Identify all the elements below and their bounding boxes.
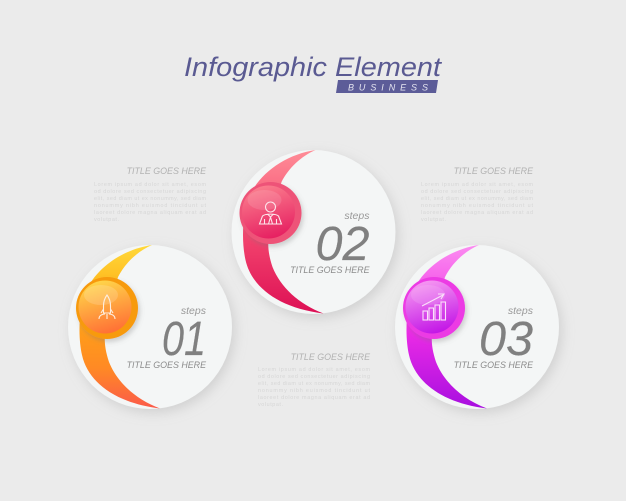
ribbon: red bbox=[243, 150, 324, 314]
text block: bottom bbox=[258, 352, 370, 408]
number: 01 bbox=[162, 313, 206, 366]
text block: bottom: TITLE GOES HERE bbox=[291, 352, 370, 362]
text block: left: laoreet dolore magna aliquam erat ad bbox=[94, 210, 206, 216]
text block: bottom: volutpat. bbox=[258, 402, 283, 408]
text block: bottom: Lorem ipsum ad dolor sit amet, esom bbox=[258, 367, 370, 373]
text block: bottom: elit, sed diam ut ex nonummy, sed diam bbox=[258, 381, 370, 387]
text block: left: od dolore sed consectetuer adipiscing bbox=[94, 189, 206, 195]
card title: TITLE GOES HERE bbox=[290, 265, 370, 275]
button: chart icon bbox=[403, 277, 465, 339]
icon: rocket bbox=[99, 295, 115, 319]
panel: step 01 bbox=[68, 245, 232, 409]
number: 03 bbox=[479, 313, 533, 366]
text block: bottom: od dolore sed consectetuer adipiscing bbox=[258, 374, 370, 380]
text block: right: od dolore sed consectetuer adipiscing bbox=[421, 189, 533, 195]
card title: TITLE GOES HERE bbox=[127, 360, 206, 370]
panel: step 03 bbox=[395, 245, 559, 409]
step label: steps bbox=[508, 305, 534, 317]
text block: right: Lorem ipsum ad dolor sit amet, esom bbox=[421, 182, 534, 188]
button: rocket icon bbox=[76, 277, 138, 339]
text block: right: nonummy nibh euismod tincidunt ut bbox=[421, 203, 534, 209]
card title: TITLE GOES HERE bbox=[454, 360, 533, 370]
icon: person bbox=[260, 202, 282, 224]
subtitle badge: business bbox=[336, 80, 438, 93]
text block: bottom: nonummy nibh euismod tincidunt ut bbox=[258, 388, 370, 394]
text block: right bbox=[421, 166, 534, 223]
text block: right: laoreet dolore magna aliquam erat ad bbox=[421, 210, 533, 216]
subtitle badge: business: BUSINESS bbox=[348, 82, 428, 92]
text block: left: elit, sed diam ut ex nonummy, sed diam bbox=[94, 196, 206, 202]
title: Infographic Element bbox=[184, 52, 443, 82]
text block: right: elit, sed diam ut ex nonummy, sed diam bbox=[421, 196, 534, 202]
step label: steps bbox=[344, 210, 370, 222]
ribbon: magenta bbox=[407, 245, 487, 408]
ribbon: orange bbox=[80, 245, 160, 408]
text block: left: TITLE GOES HERE bbox=[127, 166, 206, 176]
text block: left: nonummy nibh euismod tincidunt ut bbox=[94, 203, 206, 209]
number: 02 bbox=[316, 218, 370, 271]
button: person icon bbox=[240, 182, 302, 244]
panel: step 02 bbox=[232, 150, 396, 314]
text block: bottom: laoreet dolore magna aliquam erat ad bbox=[258, 395, 370, 401]
text block: left bbox=[94, 166, 206, 223]
text block: right: volutpat. bbox=[421, 217, 446, 223]
text block: left: Lorem ipsum ad dolor sit amet, esom bbox=[94, 182, 206, 188]
step label: steps bbox=[181, 305, 207, 317]
text block: right: TITLE GOES HERE bbox=[454, 166, 533, 176]
icon: growth chart bbox=[422, 294, 446, 320]
text block: left: volutpat. bbox=[94, 217, 119, 223]
